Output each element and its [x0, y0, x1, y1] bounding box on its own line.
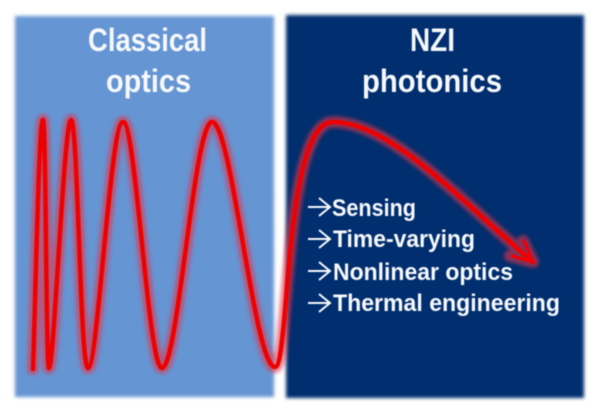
wave arrow: [33, 120, 533, 369]
heading: classical optics: [88, 22, 207, 99]
list: applications: [308, 195, 560, 317]
heading: NZI photonics: NZI: [410, 22, 455, 58]
list item: thermal engineering: Thermal engineering: [333, 290, 560, 317]
list item: nonlinear optics: Nonlinear optics: [333, 259, 513, 286]
list item: time-varying: Time-varying: [333, 226, 475, 253]
heading: NZI photonics: [362, 22, 502, 99]
heading: NZI photonics: photonics: [362, 63, 502, 99]
panel: NZI photonics: [286, 15, 584, 398]
heading: classical optics: optics: [106, 63, 191, 99]
list item: sensing: Sensing: [332, 195, 416, 222]
panel: classical optics: [15, 16, 274, 397]
heading: classical optics: Classical: [88, 22, 207, 58]
